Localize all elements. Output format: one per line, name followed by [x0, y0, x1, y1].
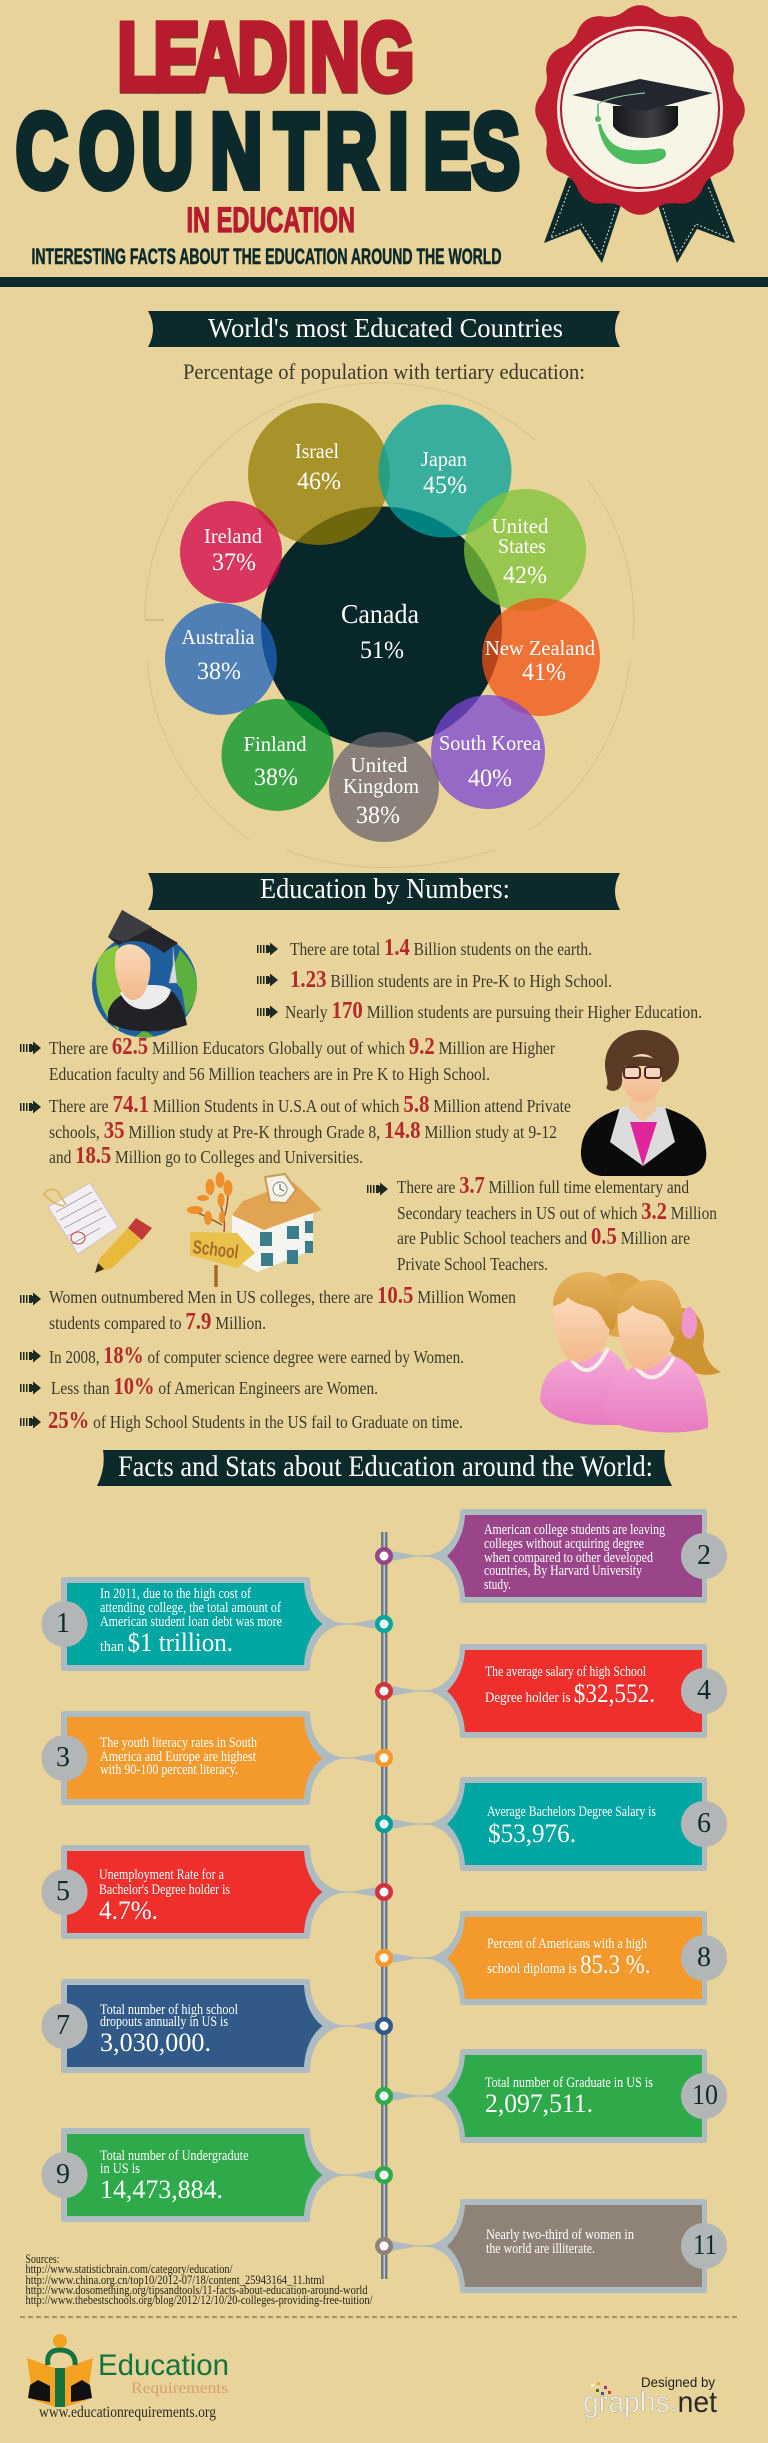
subtitle: INTERESTING FACTS ABOUT THE EDUCATION AROUND THE WORLD: [32, 244, 502, 269]
header: [16, 2, 520, 269]
icon: teacher: [581, 1030, 706, 1176]
label: United States: States: [498, 534, 546, 558]
icon: graduate with globe: [92, 910, 197, 1038]
bullet: fail to graduate: 25% of High School Students in the US fail to Graduate on time.: [48, 1408, 463, 1434]
icon: medal with graduation cap: [535, 5, 745, 263]
card 9: [42, 2128, 393, 2222]
bullet: educators: Education faculty and 56 Million teachers are in Pre K to High School.: [49, 1064, 490, 1084]
label: United Kingdom: Kingdom: [343, 774, 419, 798]
card 6: 6: [697, 1808, 711, 1839]
timeline: [381, 1532, 388, 2279]
card 7: Total number of high school: [100, 2002, 238, 2018]
card 1: 1: [56, 1608, 70, 1639]
sources: http://www.statisticbrain.com/category/education/: [26, 2262, 233, 2276]
card 8: 8: [697, 1942, 711, 1973]
bullet: US students: [20, 1092, 571, 1169]
card 11: the world are illiterate.: [486, 2241, 595, 2257]
card 1: American student loan debt was more: [100, 1614, 282, 1630]
card 6: $53,976.: [488, 1819, 576, 1848]
sources: [26, 2252, 373, 2307]
bullet: US students: There are 74.1 Million Students in U.S.A out of which 5.8 Million attend Private: [49, 1092, 571, 1118]
circle: Japan: [378, 404, 512, 538]
bullet: educators: [20, 1034, 555, 1084]
card 4: Degree holder is $32,552.: [485, 1679, 655, 1708]
bullet: US students: and 18.5 Million go to Colleges and Universities.: [49, 1143, 363, 1169]
label: United States: 42%: [503, 562, 547, 589]
sources: http://www.thebestschools.org/blog/2012/12/10/20-colleges-providing-free-tuition/: [26, 2293, 373, 2307]
label: Ireland: [204, 524, 262, 576]
label: Australia: [182, 625, 255, 685]
label: Japan: [421, 447, 467, 499]
label: Australia: 38%: [197, 658, 241, 685]
label: United Kingdom: 38%: [356, 802, 400, 829]
card 3: The youth literacy rates in South: [100, 1735, 258, 1751]
sources: Sources:: [26, 2252, 60, 2266]
label: United Kingdom: United: [350, 753, 408, 777]
bullet: full time teachers: There are 3.7 Million full time elementary and: [397, 1173, 689, 1199]
circle: Ireland: [180, 501, 282, 603]
bullet: full time teachers: Secondary teachers in US out of which 3.2 Million: [397, 1199, 717, 1225]
sources: http://www.dosomething.org/tipsandtools/11-facts-about-education-around-world: [26, 2283, 368, 2297]
card 3: 3: [56, 1742, 70, 1773]
card 11: Nearly two-third of women in: [486, 2227, 635, 2243]
card 2: 2: [697, 1540, 711, 1571]
label: Israel: 46%: [297, 468, 341, 495]
card 6: Average Bachelors Degree Salary is: [487, 1804, 656, 1820]
label: Israel: [295, 439, 341, 495]
wordmark: Education: [98, 2349, 229, 2382]
title: countries: COUNTRIES: [16, 93, 520, 210]
label: New Zealand: New Zealand: [485, 636, 595, 660]
card 2: American college students are leaving: [484, 1522, 665, 1538]
card 5: Bachelor's Degree holder is: [99, 1882, 230, 1898]
label: Canada: [341, 599, 419, 664]
bullet: women outnumbered men: [20, 1283, 516, 1335]
card 2: when compared to other developed: [484, 1550, 654, 1566]
bullet: women outnumbered men: students compared to 7.9 Million.: [49, 1309, 266, 1335]
card 5: Unemployment Rate for a: [99, 1867, 224, 1883]
circle: Australia: [165, 603, 277, 715]
card 2: study.: [484, 1577, 511, 1593]
card 2: [375, 1509, 727, 1603]
bullet: computer science: In 2008, 18% of computer science degree were earned by Women.: [49, 1343, 464, 1369]
label: Israel: Israel: [295, 439, 339, 463]
card 3: [42, 1711, 393, 1805]
card 4: 4: [697, 1675, 711, 1706]
card 7: 7: [56, 2010, 70, 2041]
logo: education requirements: Requirements: [131, 2380, 228, 2397]
label: Japan: 45%: [423, 472, 467, 499]
card 4: The average salary of high School: [485, 1664, 646, 1680]
card 1: attending college, the total amount of: [100, 1600, 281, 1616]
card 10: 2,097,511.: [485, 2089, 593, 2118]
card 8: [375, 1911, 727, 2005]
circle: Israel: [248, 403, 390, 545]
bullet: women outnumbered men: Women outnumbered Men in US colleges, there are 10.5 Million Women: [49, 1283, 516, 1309]
card 3: America and Europe are highest: [100, 1749, 256, 1765]
card 1: [42, 1577, 393, 1671]
card 3: with 90-100 percent literacy.: [100, 1762, 238, 1778]
bullet: US students: schools, 35 Million study at Pre-K through Grade 8, 14.8 Million study at 9-12: [49, 1118, 557, 1144]
card 2: colleges without acquiring degree: [484, 1536, 644, 1552]
label: Finland: Finland: [244, 732, 307, 756]
bullet: 1.4 billion: There are total 1.4 Billion students on the earth.: [290, 935, 592, 961]
icon: two girls: [540, 1272, 721, 1433]
card 10: Total number of Graduate in US is: [485, 2075, 653, 2091]
icon: notepad and pencil: [44, 1183, 152, 1273]
bullet: engineers: Less than 10% of American Engineers are Women.: [51, 1374, 378, 1400]
circle: New Zealand: [482, 598, 600, 716]
label: Canada: 51%: [360, 637, 404, 664]
divider bar: [0, 277, 768, 287]
card 1: than $1 trillion.: [100, 1628, 233, 1657]
circle: Finland: [222, 699, 334, 811]
banner: world's most educated countries: [148, 311, 620, 347]
label: South Korea: [439, 731, 542, 792]
title: leading: LEADING: [118, 2, 414, 110]
card 8: Percent of Americans with a high: [487, 1936, 648, 1952]
label: Finland: [244, 732, 307, 791]
icon: reader with book: [27, 2334, 93, 2407]
label: United Kingdom: [343, 753, 419, 829]
card 9: Total number of Undergradute: [100, 2148, 248, 2164]
sources: http://www.china.org.cn/top10/2012-07/18/content_25943164_11.html: [26, 2273, 325, 2287]
card 5: 4.7%.: [99, 1896, 158, 1925]
card 4: [375, 1644, 727, 1738]
banner: education by numbers: [148, 873, 620, 910]
circle: United States: [464, 489, 586, 611]
card 5: [42, 1845, 393, 1939]
card 7: [42, 1979, 393, 2073]
logo: education requirements: [27, 2334, 229, 2421]
banner: facts and stats: Facts and Stats about Education around the World:: [118, 1450, 653, 1483]
label: Japan: Japan: [421, 447, 467, 471]
label: United States: [492, 514, 549, 589]
card 7: 3,030,000.: [100, 2028, 211, 2057]
label: Australia: Australia: [182, 625, 255, 649]
card 5: 5: [56, 1876, 70, 1907]
circle: South Korea: [431, 695, 545, 809]
label: Canada: Canada: [341, 599, 419, 629]
card 9: 14,473,884.: [100, 2175, 223, 2204]
card 2: countries, By Harvard University: [484, 1563, 643, 1579]
label: United States: United: [492, 514, 549, 538]
label: Ireland: 37%: [212, 549, 256, 576]
card 11: 11: [693, 2230, 717, 2261]
url: www.educationrequirements.org: [39, 2404, 216, 2421]
chart: circles of countries: [145, 383, 634, 868]
card 7: dropouts annually in US is: [100, 2014, 228, 2030]
credit: designed by graphs.net: Designed by: [641, 2374, 715, 2390]
label: South Korea: South Korea: [439, 731, 542, 755]
bullet: full time teachers: are Public School teachers and 0.5 Million are: [397, 1224, 690, 1250]
card 10: 10: [692, 2080, 718, 2111]
circle: United Kingdom: [329, 732, 439, 842]
card 9: in US is: [100, 2161, 140, 2177]
label: South Korea: 40%: [468, 765, 512, 792]
label: Ireland: Ireland: [204, 524, 262, 548]
icon: school house: School: [191, 1237, 240, 1264]
banner: education by numbers: Education by Numbers:: [260, 873, 510, 905]
credit: designed by graphs.net: graphs.net: [583, 2386, 718, 2419]
bullet: educators: There are 62.5 Million Educators Globally out of which 9.2 Million are Higher: [49, 1034, 555, 1060]
chart subtitle: Percentage of population with tertiary education:: [183, 359, 585, 384]
card 9: 9: [56, 2159, 70, 2190]
card 8: school diploma is 85.3 %.: [487, 1950, 650, 1979]
card 10: [375, 2049, 727, 2143]
icon: school house: [187, 1172, 322, 1287]
circle: Canada: [261, 506, 502, 748]
card 1: In 2011, due to the high cost of: [100, 1586, 251, 1602]
bullet: 1.23 billion: 1.23 Billion students are in Pre-K to High School.: [290, 967, 612, 993]
bullet: full time teachers: [367, 1173, 717, 1274]
card 11: [375, 2199, 727, 2293]
title: in education: IN EDUCATION: [186, 201, 355, 240]
card 6: [375, 1777, 727, 1871]
bullet: full time teachers: Private School Teachers.: [397, 1254, 548, 1274]
label: New Zealand: 41%: [522, 659, 566, 686]
label: Finland: 38%: [254, 764, 298, 791]
bullet: 170 million: Nearly 170 Million students are pursuing their Higher Education.: [285, 998, 702, 1024]
banner: world's most educated countries: World's most Educated Countries: [208, 313, 563, 343]
label: New Zealand: [485, 636, 595, 686]
